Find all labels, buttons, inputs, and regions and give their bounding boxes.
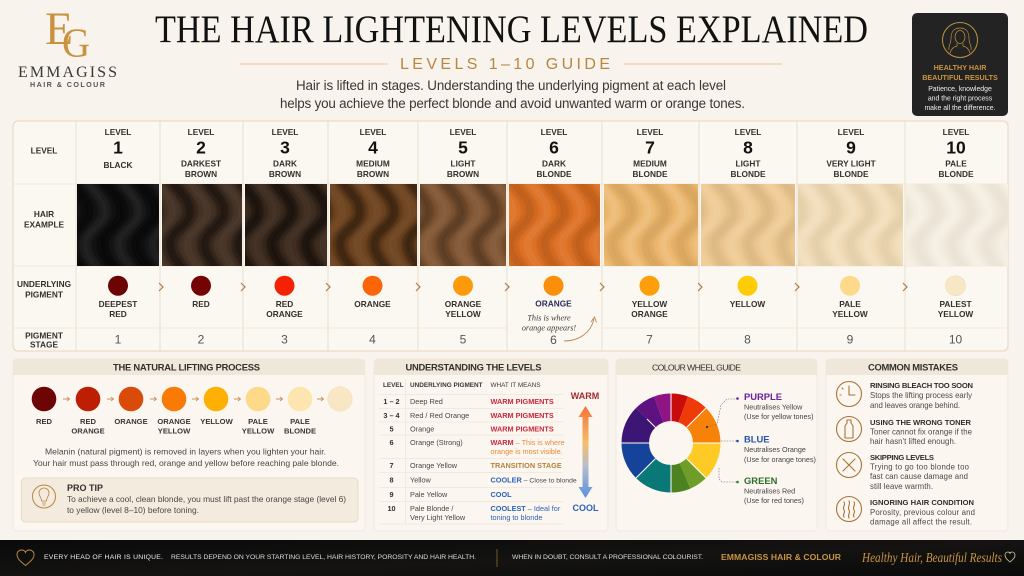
progress chevrons: [159, 283, 907, 291]
column headers: BROWN: [447, 169, 479, 179]
levels table: COOLER – Close to blonde: [490, 476, 577, 484]
column headers: 8: [743, 138, 753, 158]
hair swatch: level 7: [604, 184, 698, 266]
column headers: LIGHT: [736, 158, 760, 168]
small arrows: [63, 397, 324, 401]
heading: COMMON MISTAKES: [868, 362, 958, 372]
mistake 3: still leave warmth.: [870, 482, 933, 491]
column headers: LEVEL: [943, 127, 969, 137]
column headers: BLONDE: [536, 169, 572, 179]
levels table: WARM PIGMENTS: [490, 397, 554, 406]
pigment names: ORANGE: [266, 309, 303, 319]
colour wheel: [620, 392, 722, 494]
levels table: UNDERLYING PIGMENT: [410, 382, 483, 389]
row labels: EXAMPLE: [24, 220, 65, 230]
stage numbers: 9: [847, 332, 854, 346]
levels table: 9: [389, 490, 394, 499]
warm to cool arrow: WARM: [571, 391, 599, 401]
column headers: BROWN: [269, 169, 301, 179]
title: THE HAIR LIGHTENING LEVELS EXPLAINED: [155, 8, 868, 51]
column headers: DARKEST: [181, 158, 221, 168]
column headers: LEVEL: [360, 127, 386, 137]
pro tip box: PRO TIP: [67, 483, 103, 493]
levels table: [379, 379, 577, 524]
callout: blue: Neutralises Orange: [744, 445, 806, 454]
panel: understanding the levels: [374, 359, 608, 531]
column headers: 5: [458, 138, 468, 158]
hair swatch: level 3: [245, 184, 327, 266]
callout connectors: [706, 397, 739, 483]
levels table: 8: [389, 476, 394, 484]
pro tip box: To achieve a cool, clean blonde, you must lift past the orange stage (level 6): [67, 494, 346, 504]
levels table: 7: [389, 461, 394, 470]
row labels: STAGE: [30, 340, 58, 350]
callout: purple: Neutralises Yellow: [744, 402, 803, 412]
stage numbers: 1: [115, 332, 122, 346]
explanation text: Your hair must pass through red, orange and yellow before reaching pale blonde.: [33, 458, 339, 468]
subtitle with rules: LEVELS 1–10 GUIDE: [400, 56, 610, 73]
stage labels: RED: [80, 417, 97, 426]
callout: this is where orange appears: orange appears!: [522, 324, 576, 332]
column headers: 4: [368, 138, 378, 158]
callout: green: GREEN: [744, 475, 778, 486]
footer brand: EMMAGISS HAIR & COLOUR: [721, 552, 842, 562]
column headers: 3: [280, 138, 290, 158]
levels table: Yellow: [410, 476, 432, 484]
mistake 3: [836, 452, 970, 491]
levels table: toning to blonde: [490, 513, 542, 522]
levels table: COOL: [490, 490, 512, 499]
column headers: 10: [946, 138, 966, 158]
pigment names: YELLOW: [938, 309, 973, 319]
mistake 3: fast can cause damage and: [870, 472, 968, 481]
levels table: Red / Red Orange: [410, 411, 469, 420]
callout: purple: PURPLE: [744, 391, 782, 402]
stage numbers: 6: [550, 333, 557, 347]
pigment names: ORANGE: [354, 299, 391, 309]
levels table: Very Light Yellow: [410, 513, 466, 522]
stage labels: ORANGE: [71, 426, 105, 436]
hair swatch: level 10: [906, 184, 1008, 266]
hair swatch: level 2: [162, 184, 242, 266]
heading: UNDERSTANDING THE LEVELS: [406, 362, 542, 372]
levels table: COOLEST – Ideal for: [490, 504, 561, 513]
levels table: 3 – 4: [383, 411, 401, 420]
mistake 2: USING THE WRONG TONER: [870, 418, 972, 427]
pigment names: [99, 298, 973, 319]
explanation text: Melanin (natural pigment) is removed in layers when you lighten your hair.: [45, 446, 326, 456]
stage numbers: [115, 332, 962, 347]
panel: level comparison table: [13, 121, 1008, 351]
warm to cool arrow: [571, 391, 599, 513]
callout: blue: BLUE: [744, 434, 770, 444]
column headers: LEVEL: [637, 127, 663, 137]
column headers: BLONDE: [833, 169, 869, 179]
stage labels: ORANGE: [157, 417, 191, 426]
badge: healthy hair: [912, 13, 1008, 116]
mistake 4: Porosity, previous colour and: [870, 508, 975, 517]
column headers: BLONDE: [938, 169, 974, 179]
hair swatch: level 9: [798, 184, 903, 266]
logo: Emmagiss Hair & Colour: EMMAGISS: [18, 64, 117, 81]
column headers: MEDIUM: [356, 158, 390, 168]
hair swatch: level 4: [330, 184, 417, 266]
column headers: LEVEL: [735, 127, 761, 137]
column headers: DARK: [273, 158, 297, 168]
column headers: 7: [645, 138, 655, 158]
mistake 4: [836, 496, 975, 526]
row labels: PIGMENT: [25, 290, 63, 300]
pro tip box: [22, 478, 358, 522]
callout: green: [744, 475, 804, 505]
column headers: MEDIUM: [633, 158, 667, 168]
pigment names: PALE: [839, 299, 861, 309]
stage numbers: 4: [369, 332, 376, 346]
levels table: Orange Yellow: [410, 461, 458, 470]
pigment names: ORANGE: [631, 309, 668, 319]
levels table: orange is most visible.: [490, 447, 563, 456]
stage labels: YELLOW: [200, 417, 234, 426]
levels table: 1 – 2: [383, 397, 400, 406]
column headers: [103, 127, 974, 179]
column headers: BLONDE: [730, 169, 766, 179]
callout: this is where orange appears: This is where: [527, 314, 571, 322]
pigment names: RED: [192, 299, 210, 309]
stage numbers: 10: [949, 332, 962, 346]
column headers: LEVEL: [838, 127, 864, 137]
intro text: Hair is lifted in stages. Understanding the underlying pigment at each level: [296, 78, 726, 93]
column headers: LEVEL: [541, 127, 567, 137]
column headers: BROWN: [357, 169, 389, 179]
levels table: WHAT IT MEANS: [490, 382, 541, 389]
stage labels: PALE: [290, 417, 310, 426]
pigment names: YELLOW: [632, 299, 667, 309]
mistake 2: [836, 416, 972, 446]
mistake 4: damage all affect the result.: [870, 518, 972, 526]
pigment names: YELLOW: [445, 309, 481, 319]
footer message: EVERY HEAD OF HAIR IS UNIQUE.: [44, 554, 163, 561]
row labels: UNDERLYING: [17, 279, 71, 289]
stage numbers: 8: [744, 332, 751, 346]
warm to cool arrow: COOL: [572, 503, 599, 513]
row labels: LEVEL: [31, 146, 57, 156]
hair swatch: level 5: [420, 184, 506, 266]
stage labels: BLONDE: [284, 426, 316, 436]
column headers: 9: [846, 138, 856, 158]
pigment names: PALEST: [939, 299, 972, 309]
icon: heart: [17, 550, 34, 566]
levels table: WARM – This is where: [490, 438, 565, 447]
column headers: BLACK: [103, 160, 133, 170]
stage labels: PALE: [248, 417, 268, 426]
column headers: LEVEL: [272, 127, 298, 137]
mistake 4: IGNORING HAIR CONDITION: [870, 498, 974, 507]
callout: purple: [744, 391, 814, 421]
panel: common mistakes: [826, 359, 1008, 531]
row labels: [17, 146, 71, 350]
mistake 1: RINSING BLEACH TOO SOON: [870, 381, 973, 390]
column headers: LEVEL: [105, 127, 131, 137]
heading: COLOUR WHEEL GUIDE: [652, 362, 741, 372]
column headers: 2: [196, 138, 206, 158]
column headers: 1: [113, 138, 123, 158]
icon: small heart: [1005, 552, 1015, 562]
column headers: BROWN: [185, 169, 217, 179]
levels table: Orange: [410, 424, 434, 434]
footer bar: [0, 540, 1024, 576]
stage labels: YELLOW: [242, 426, 275, 436]
callout: blue: [744, 434, 816, 464]
callout: green: Neutralises Red: [744, 486, 795, 496]
column headers: LEVEL: [450, 127, 476, 137]
stage numbers: 2: [198, 332, 205, 346]
stage labels: YELLOW: [158, 426, 191, 436]
mistake 3: Trying to go too blonde too: [870, 462, 970, 472]
hair swatch: level 6: [509, 184, 600, 266]
badge: healthy hair: make all the difference.: [924, 105, 996, 112]
column headers: BLONDE: [632, 169, 668, 179]
logo: Emmagiss Hair & Colour: G: [62, 20, 90, 66]
row labels: HAIR: [34, 209, 54, 219]
pigment names: RED: [109, 309, 127, 319]
column headers: 6: [549, 138, 559, 158]
badge: healthy hair: Patience, knowledge: [928, 86, 992, 93]
pigment names: DEEPEST: [99, 299, 137, 309]
levels table: WARM PIGMENTS: [490, 424, 554, 434]
levels table: LEVEL: [383, 382, 404, 389]
pigment stage circles: [32, 387, 352, 411]
heading: THE NATURAL LIFTING PROCESS: [113, 362, 260, 372]
callout: blue: (Use for orange tones): [744, 455, 816, 464]
badge: healthy hair: and the right process: [928, 96, 993, 102]
levels table: Deep Red: [410, 397, 443, 406]
stage labels: ORANGE: [114, 417, 148, 426]
mistake 1: and leaves orange behind.: [870, 401, 960, 410]
column headers: DARK: [542, 158, 566, 168]
stage labels: [36, 417, 316, 436]
column headers: PALE: [945, 158, 967, 168]
stage numbers: 5: [460, 332, 467, 346]
levels table: 10: [387, 504, 396, 513]
levels table: 5: [389, 424, 394, 434]
pigment names: YELLOW: [730, 299, 765, 309]
intro text: [280, 78, 745, 111]
badge: healthy hair: BEAUTIFUL RESULTS: [922, 73, 998, 82]
logo: Emmagiss Hair & Colour: HAIR & COLOUR: [30, 80, 106, 89]
mistake 2: hair hasn't lifted enough.: [870, 437, 956, 446]
explanation text: [33, 446, 339, 468]
levels table: Pale Yellow: [410, 490, 448, 499]
levels table: TRANSITION STAGE: [490, 461, 562, 470]
mistake 1: [836, 381, 973, 410]
levels table: Orange (Strong): [410, 438, 463, 447]
callout: green: (Use for red tones): [744, 496, 804, 505]
badge: healthy hair: HEALTHY HAIR: [934, 63, 987, 72]
panel: the natural lifting process: [13, 359, 365, 531]
stage numbers: 7: [646, 332, 653, 346]
footer message: RESULTS DEPEND ON YOUR STARTING LEVEL, HAIR HISTORY, POROSITY AND HAIR HEALTH.: [171, 554, 476, 561]
mistake 2: Toner cannot fix orange if the: [870, 428, 972, 436]
mistake 1: Stops the lifting process early: [870, 391, 972, 400]
underlying pigment swatches: [108, 276, 966, 296]
levels table: Pale Blonde /: [410, 504, 454, 513]
footer advice: WHEN IN DOUBT, CONSULT A PROFESSIONAL COLOURIST.: [512, 554, 703, 561]
pigment names: RED: [276, 299, 293, 309]
intro text: helps you achieve the perfect blonde and avoid unwanted warm or orange tones.: [280, 96, 745, 111]
row labels: PIGMENT: [25, 330, 63, 340]
pro tip box: to yellow (level 8–10) before toning.: [67, 505, 199, 515]
levels table: 6: [389, 438, 394, 447]
hair swatch: level 8: [701, 184, 795, 266]
pigment names: YELLOW: [832, 309, 868, 319]
callout: purple: (Use for yellow tones): [744, 412, 814, 421]
levels table: WARM PIGMENTS: [490, 411, 554, 420]
callout: this is where orange appears: [522, 314, 596, 341]
panel: colour wheel guide: [616, 359, 817, 531]
logo: Emmagiss Hair & Colour: E: [45, 3, 73, 55]
pigment names: ORANGE: [535, 298, 572, 308]
pigment names: ORANGE: [445, 299, 482, 309]
logo: Emmagiss Hair & Colour: [18, 3, 117, 89]
stage numbers: 3: [281, 332, 288, 346]
column headers: VERY LIGHT: [826, 158, 876, 168]
column headers: LEVEL: [188, 127, 214, 137]
mistake 3: SKIPPING LEVELS: [870, 453, 934, 462]
stage labels: RED: [36, 417, 53, 426]
column headers: LIGHT: [451, 158, 475, 168]
hair swatch: level 1: [77, 184, 159, 266]
